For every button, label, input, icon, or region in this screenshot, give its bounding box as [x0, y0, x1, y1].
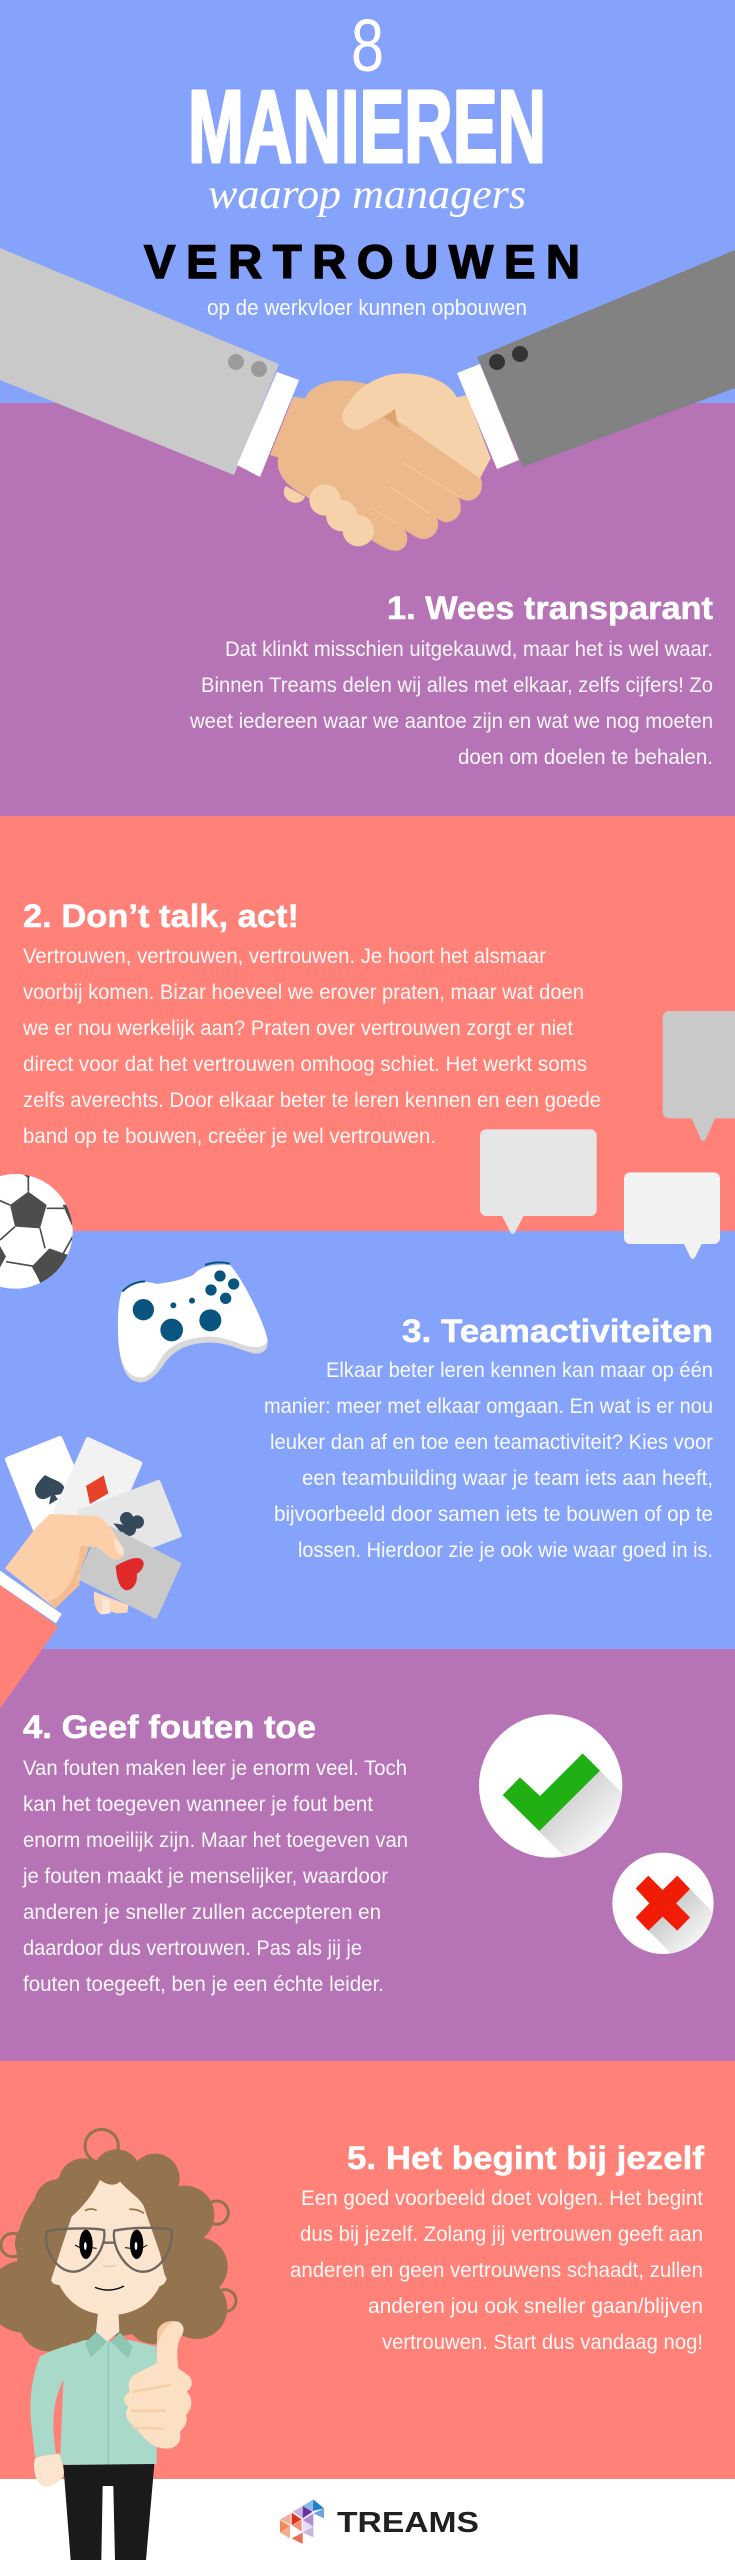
hair curls [1, 2129, 236, 2312]
text block: anderen jou ook sneller gaan/blijven [368, 2295, 703, 2318]
panel: footer with logo [0, 2479, 735, 2560]
text block [22, 1757, 408, 1996]
panel: 1. Wees transparant [0, 403, 735, 816]
logo mark [280, 2499, 324, 2544]
panel: 3. Teamactiviteiten [0, 1231, 735, 1649]
text block: fouten toegeeft, ben je een échte leider. [23, 1973, 384, 1996]
text block: kan het toegeven wanneer je fout bent [23, 1793, 373, 1816]
sleeve [0, 1585, 58, 1708]
bubble: near white [624, 1172, 720, 1259]
card: clubs [80, 1482, 179, 1565]
icon: speech bubbles [480, 1011, 735, 1259]
text block: band op te bouwen, creëer je wel vertrouwen. [23, 1125, 436, 1148]
glasses [46, 2228, 172, 2272]
title: VERTROUWEN: VERTROUWEN [144, 235, 580, 288]
icon: soccer ball [0, 1172, 75, 1289]
title: MANIEREN: MANIEREN [188, 69, 546, 184]
title: waarop managers: waarop managers [208, 172, 526, 218]
panel: 5. Het begint bij jezelf [0, 2061, 735, 2479]
left sleeve [0, 248, 299, 477]
heading: 1. Wees transparant: 1. Wees transparant [387, 590, 713, 626]
text block: Elkaar beter leren kennen kan maar op één [326, 1359, 713, 1382]
text block: anderen en geen vertrouwens schaadt, zullen [290, 2259, 703, 2282]
text block: weet iedereen waar we aantoe zijn en wat we nog moeten [189, 710, 713, 733]
icon: green check mark [479, 1714, 622, 1858]
text block: doen om doelen te behalen. [458, 746, 713, 769]
text block: lossen. Hierdoor zie je ook wie waar goed in is. [298, 1539, 713, 1562]
heading: 5. Het begint bij jezelf: 5. Het begint bij jezelf [347, 2140, 704, 2176]
text block: enorm moeilijk zijn. Maar het toegeven van [23, 1829, 408, 1852]
text block: Een goed voorbeeld doet volgen. Het begint [301, 2187, 703, 2210]
text block [22, 945, 601, 1148]
text block: bijvoorbeeld door samen iets te bouwen of op te [274, 1503, 713, 1526]
text block: Vertrouwen, vertrouwen, vertrouwen. Je hoort het alsmaar [23, 945, 546, 968]
left hand [34, 2453, 64, 2487]
text block: Binnen Treams delen wij alles met elkaar, zelfs cijfers! Zo [201, 674, 713, 697]
bubble: light grey [480, 1129, 597, 1234]
subtitle: op de werkvloer kunnen opbouwen [207, 295, 527, 320]
thumbs-up hand [124, 2321, 192, 2449]
heading: 3. Teamactiviteiten: 3. Teamactiviteiten [402, 1313, 713, 1349]
fingers behind card [94, 1592, 128, 1614]
text block: een teambuilding waar je team iets aan heeft, [302, 1467, 713, 1490]
panel: 2. Don't talk, act! [0, 816, 735, 1231]
text block: dus bij jezelf. Zolang jij vertrouwen geeft aan [300, 2223, 703, 2246]
card: hearts [79, 1525, 179, 1617]
title [144, 4, 580, 320]
text block: anderen je sneller zullen accepteren en [23, 1901, 381, 1924]
illustration: woman with glasses giving thumbs up [0, 2129, 236, 2560]
icon: game controller [118, 1262, 268, 1382]
text block: Van fouten maken leer je enorm veel. Toch [23, 1757, 407, 1780]
bubble: grey [663, 1011, 735, 1141]
face [51, 2180, 167, 2315]
cuff [0, 1571, 62, 1623]
shirt [30, 2332, 157, 2469]
text block [189, 638, 713, 769]
title: number 8: 8 [351, 4, 384, 87]
hands [270, 373, 491, 551]
text block: daardoor dus vertrouwen. Pas als jij je [23, 1937, 362, 1960]
text block [290, 2187, 703, 2354]
card: diamonds [56, 1439, 140, 1525]
panel: header with title and handshake [0, 0, 735, 403]
text block: direct voor dat het vertrouwen omhoog schiet. Het werkt soms [23, 1053, 587, 1076]
icon: red cross [612, 1852, 714, 1954]
panel: 4. Geef fouten toe [0, 1649, 735, 2061]
text block: Dat klinkt misschien uitgekauwd, maar het is wel waar. [225, 638, 713, 661]
text block: zelfs averechts. Door elkaar beter te leren kennen en een goede [23, 1089, 601, 1112]
icon: hand holding playing cards [0, 1438, 179, 1708]
text block: vertrouwen. Start dus vandaag nog! [382, 2331, 703, 2354]
heading: 2. Don't talk, act!: 2. Don’t talk, act! [23, 898, 299, 934]
text block: we er nou werkelijk aan? Praten over vertrouwen zorgt er niet [22, 1017, 573, 1040]
hair [0, 2149, 228, 2352]
neck [96, 2310, 119, 2342]
trousers [63, 2464, 154, 2560]
text block: je fouten maakt je menselijker, waardoor [22, 1865, 388, 1888]
text block [264, 1359, 713, 1562]
logo wordmark: TREAMS [337, 2507, 479, 2539]
text block: voorbij komen. Bizar hoeveel we erover praten, maar wat doen [23, 981, 584, 1004]
illustration: handshake [0, 248, 735, 551]
card: spades [7, 1438, 95, 1532]
heading: 4. Geef fouten toe: 4. Geef fouten toe [23, 1709, 316, 1745]
hand [5, 1514, 124, 1608]
text block: leuker dan af en toe een teamactiviteit? Kies voor [270, 1431, 713, 1454]
text block: manier: meer met elkaar omgaan. En wat is er nou [264, 1395, 713, 1418]
right sleeve [457, 250, 735, 469]
